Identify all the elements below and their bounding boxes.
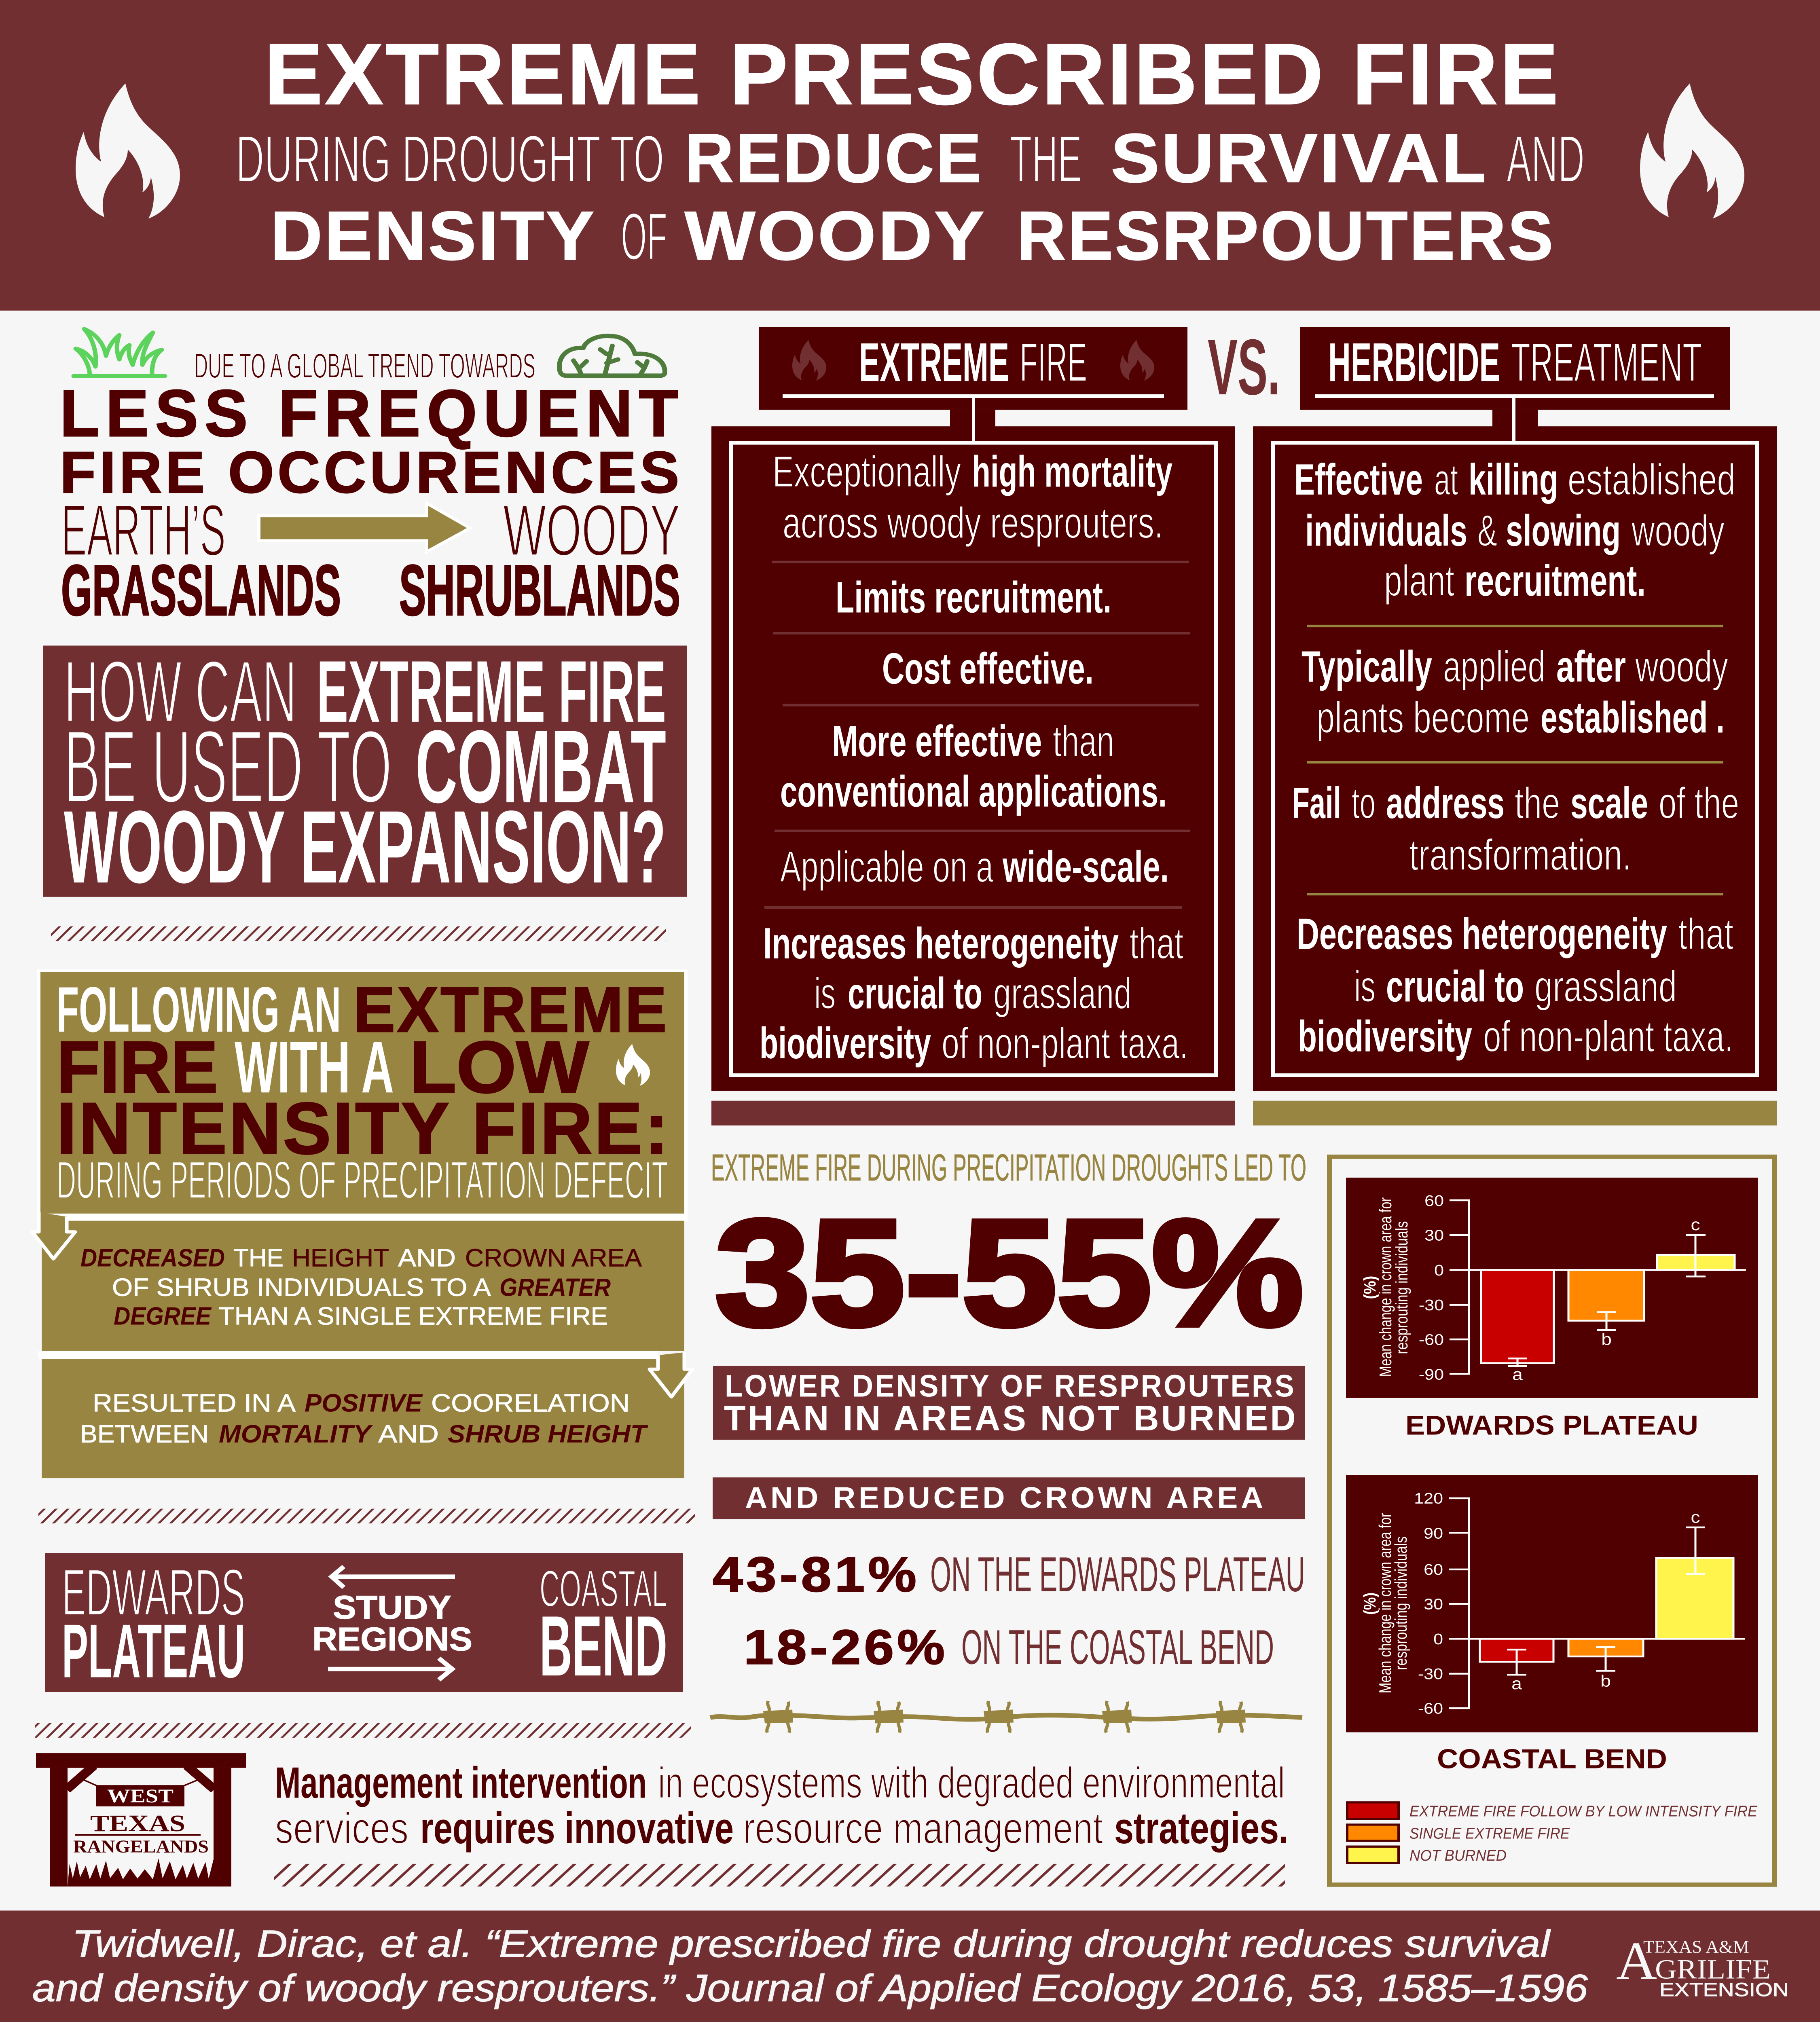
- heading: coastal bend: COASTAL BEND: [1437, 1744, 1667, 1774]
- header: extreme fire: FIRE: [1020, 332, 1087, 393]
- heading: following an extreme fire with a low intensity fire: [57, 973, 671, 1210]
- panel: resulted in: [38, 1351, 692, 1478]
- text: earth's grasslands: [61, 489, 341, 630]
- text: earth's grasslands: EARTH’S: [61, 489, 226, 571]
- legend: [1347, 1802, 1758, 1864]
- vs: VS.: [1208, 323, 1280, 411]
- panel: following an extreme fire: [37, 969, 688, 1221]
- panel: global trend: DUE TO A GLOBAL TREND TOWARDS: [194, 347, 535, 385]
- chart: edwards plateau: b: [1601, 1330, 1612, 1349]
- header: extreme fire: EXTREME: [859, 332, 1009, 393]
- panel: extreme fire list: grassland: [993, 969, 1132, 1018]
- panel: herbicide list: at: [1434, 455, 1458, 504]
- heading: following an extreme fire with a low intensity fire: EXTREME: [353, 973, 669, 1045]
- title: THE: [1010, 122, 1082, 196]
- panel: extreme fire list: wide-scale.: [1002, 843, 1169, 891]
- text: positive correlation: [80, 1389, 648, 1448]
- panel: question: EXTREME FIRE: [317, 643, 666, 740]
- panel: question: BE USED TO: [64, 709, 392, 824]
- panel: herbicide list: individuals: [1305, 507, 1467, 555]
- heading: less frequent fire occurences: [60, 376, 685, 505]
- panel: herbicide list: slowing: [1506, 507, 1621, 555]
- logo: agrilife extension: [1616, 1931, 1789, 2000]
- panel: herbicide list: grassland: [1534, 962, 1677, 1011]
- legend: EXTREME FIRE FOLLOW BY LOW INTENSITY FIRE: [1409, 1802, 1758, 1820]
- panel: extreme fire list: Exceptionally: [772, 448, 961, 496]
- citation: and density of woody resprouters.” Journal of Applied Ecology 2016, 53, 1585–1596: [32, 1967, 1588, 2009]
- panel: study regions: COASTAL: [540, 1560, 667, 1618]
- title: DENSITY: [271, 198, 596, 274]
- text: decreased: [80, 1244, 642, 1330]
- axis label: [1361, 1513, 1411, 1694]
- panel: herbicide list: after: [1556, 643, 1626, 691]
- text: management intervention: [275, 1759, 1289, 1853]
- logo: west texas rangelands: TEXAS: [90, 1810, 185, 1836]
- footer: [0, 1910, 1820, 2022]
- panel: extreme fire list: Applicable on a: [780, 843, 994, 891]
- heading: less frequent fire occurences: FIRE OCCURENCES: [60, 439, 683, 505]
- panel: herbicide list: killing: [1469, 455, 1558, 504]
- axis label: (%): [1361, 1593, 1380, 1615]
- callout: lower density: LOWER DENSITY OF RESPROUTERS: [725, 1368, 1296, 1403]
- chart: coastal bend: a: [1511, 1675, 1522, 1693]
- panel: herbicide list: Fail: [1292, 779, 1341, 828]
- panel: global trend: GRASSLANDS: [61, 550, 341, 630]
- chart: coastal bend: -30: [1418, 1665, 1443, 1682]
- chart: edwards plateau: c: [1691, 1216, 1700, 1234]
- text: decreased: DECREASED: [80, 1244, 225, 1272]
- text: management intervention: requires innovative: [420, 1804, 734, 1853]
- panel: extreme fire list: across woody resprouters.: [783, 499, 1163, 547]
- text: positive correlation: POSITIVE: [305, 1389, 423, 1417]
- panel: herbicide list: is: [1354, 962, 1376, 1011]
- panel: study regions: STUDY: [333, 1589, 451, 1626]
- title: WOODY: [685, 198, 986, 274]
- panel: study regions: PLATEAU: [62, 1608, 245, 1694]
- chart: coastal bend: 30: [1424, 1595, 1443, 1613]
- title: RESRPOUTERS: [1017, 198, 1555, 274]
- arrow: right: [328, 1658, 452, 1680]
- text: decreased: OF SHRUB INDIVIDUALS TO A: [112, 1273, 491, 1302]
- header: herbicide treatment: HERBICIDE: [1328, 332, 1500, 393]
- citation: Twidwell, Dirac, et al. “Extreme prescribed fire during drought reduces survival: [72, 1923, 1551, 1965]
- stat: edwards plateau: 43-81%: [713, 1547, 920, 1602]
- panel: global trend: [60, 329, 685, 630]
- panel: extreme fire list: crucial to: [848, 969, 982, 1018]
- text: positive correlation: SHRUB HEIGHT: [448, 1420, 648, 1448]
- title: DURING DROUGHT TO: [236, 122, 664, 196]
- arrow: left: [332, 1567, 455, 1587]
- title: [236, 26, 1585, 274]
- icon: bush: [559, 336, 665, 376]
- arrow: down right: [650, 1352, 692, 1397]
- panel: question: COMBAT: [415, 709, 666, 824]
- arrow: down left: [32, 1212, 75, 1259]
- chart: coastal bend: 90: [1424, 1525, 1443, 1542]
- panel: extreme fire list: high mortality: [972, 448, 1172, 496]
- panel: herbicide list: Effective: [1294, 455, 1423, 504]
- panel: decreased height: [32, 1212, 688, 1351]
- heading: following an extreme fire with a low intensity fire: INTENSITY FIRE:: [57, 1087, 671, 1169]
- text: woody shrublands: WOODY: [503, 489, 680, 571]
- chart: edwards plateau: 0: [1434, 1261, 1444, 1279]
- panel: herbicide list: of the: [1659, 779, 1739, 828]
- chart: edwards plateau: [1346, 1178, 1758, 1398]
- legend: SINGLE EXTREME FIRE: [1409, 1825, 1570, 1842]
- chart: coastal bend: 0: [1433, 1630, 1443, 1648]
- heading: following an extreme fire with a low intensity fire: WITH A: [235, 1026, 394, 1108]
- chart: coastal bend: c: [1691, 1508, 1700, 1527]
- panel: study regions: REGIONS: [312, 1621, 472, 1658]
- logo: agrilife extension: A: [1616, 1931, 1657, 1990]
- panel: extreme fire list: of non-plant taxa.: [942, 1019, 1188, 1068]
- panel: extreme fire list: More effective: [832, 717, 1042, 766]
- panel: question: WOODY EXPANSION?: [64, 789, 666, 905]
- icon: barbed wire: [710, 1701, 1302, 1732]
- header: herbicide treatment: [1300, 327, 1730, 410]
- panel: herbicide list: biodiversity: [1298, 1012, 1472, 1061]
- text: management intervention: in ecosystems with degraded environmental: [658, 1759, 1285, 1807]
- panel: herbicide list: plant: [1384, 556, 1454, 605]
- stat: coastal bend: 18-26%: [744, 1620, 948, 1675]
- header banner: AND: [1507, 122, 1585, 196]
- text: decreased: GREATER: [499, 1273, 611, 1302]
- text: decreased: CROWN AREA: [465, 1244, 642, 1272]
- icon: small flame: [616, 1044, 650, 1086]
- panel: extreme fire list: than: [1053, 717, 1114, 766]
- icon: flame right: [1120, 340, 1154, 381]
- panel: herbicide list: applied: [1443, 643, 1545, 691]
- arrow: grasslands to shrublands: [259, 503, 470, 552]
- panel: herbicide list: established: [1568, 455, 1735, 504]
- panel: key statistics: ON THE COASTAL BEND: [961, 1620, 1274, 1675]
- callout: reduced crown area: AND REDUCED CROWN AREA: [745, 1481, 1266, 1514]
- panel: study regions: [45, 1553, 683, 1694]
- panel: herbicide list: Typically: [1302, 643, 1432, 691]
- heading: following an extreme fire with a low intensity fire: FOLLOWING AN: [57, 973, 341, 1045]
- text: positive correlation: BETWEEN: [80, 1420, 209, 1448]
- panel: extreme fire list: Increases heterogeneity: [763, 919, 1119, 968]
- text: positive correlation: AND: [378, 1420, 439, 1448]
- panel: herbicide list: recruitment.: [1464, 556, 1646, 605]
- text: positive correlation: RESULTED IN A: [93, 1389, 296, 1417]
- chart: edwards plateau: -60: [1419, 1331, 1444, 1348]
- axis label: [1361, 1197, 1412, 1377]
- panel: study regions: EDWARDS: [62, 1555, 245, 1629]
- stat: edwards plateau: [713, 1547, 1305, 1602]
- chart: edwards plateau: 60: [1424, 1192, 1444, 1210]
- panel: herbicide list: transformation.: [1409, 831, 1632, 880]
- heading: following an extreme fire with a low intensity fire: FIRE: [57, 1026, 218, 1108]
- stat: 35-55%: 35-55%: [715, 1189, 1304, 1357]
- chart: coastal bend: 120: [1414, 1489, 1443, 1507]
- panel: extreme fire list: Limits recruitment.: [836, 573, 1111, 622]
- title: SURVIVAL: [1111, 120, 1488, 197]
- text: decreased: AND: [398, 1244, 456, 1272]
- callout: lower density: [713, 1366, 1305, 1440]
- text: woody shrublands: [399, 489, 680, 630]
- bar: olive accent: [1253, 1101, 1777, 1125]
- icon: grass: [74, 329, 165, 376]
- callout: lower density: THAN IN AREAS NOT BURNED: [724, 1398, 1298, 1438]
- title: REDUCE: [685, 120, 983, 197]
- axis label: Mean change in crown area for: [1376, 1513, 1395, 1694]
- panel: herbicide list: &: [1477, 507, 1497, 555]
- panel: herbicide list: to: [1352, 779, 1376, 828]
- legend: NOT BURNED: [1409, 1846, 1507, 1864]
- chart: edwards plateau: a: [1512, 1366, 1523, 1384]
- text: decreased: HEIGHT: [292, 1244, 389, 1272]
- text: management intervention: Management intervention: [275, 1759, 647, 1807]
- text: management intervention: services: [275, 1804, 408, 1853]
- panel: extreme fire list: conventional applications.: [780, 768, 1167, 816]
- panel: extreme fire list: Cost effective.: [882, 645, 1094, 693]
- panel: herbicide list: crucial to: [1386, 962, 1524, 1011]
- axis label: resprouting individuals: [1393, 1221, 1412, 1354]
- panel: study regions: BEND: [540, 1598, 667, 1694]
- logo: west texas rangelands: [36, 1753, 246, 1887]
- panel: charts frame: [1329, 1157, 1774, 1885]
- text: ON THE EDWARDS PLATEAU: [930, 1547, 1305, 1602]
- chart: coastal bend: 60: [1424, 1561, 1443, 1578]
- icon: right flame: [1640, 83, 1744, 218]
- panel: herbicide list: woody: [1635, 643, 1728, 691]
- text: positive correlation: COORELATION: [431, 1389, 630, 1417]
- axis label: resprouting individuals: [1392, 1536, 1411, 1670]
- title: OF: [621, 199, 667, 274]
- chart: coastal bend: [1346, 1475, 1758, 1732]
- panel: herbicide list: scale: [1570, 779, 1648, 828]
- chart: edwards plateau: -90: [1419, 1366, 1444, 1383]
- panel: herbicide list: the: [1515, 779, 1560, 828]
- panel: question: [43, 643, 687, 905]
- panel: herbicide list: woody: [1631, 507, 1725, 555]
- logo: agrilife extension: GRILIFE: [1655, 1953, 1771, 1984]
- panel: herbicide list: [1253, 398, 1777, 1091]
- axis label: (%): [1361, 1276, 1380, 1299]
- text: DURING PERIODS OF PRECIPITATION DEFECIT: [57, 1151, 668, 1210]
- panel: extreme fire list: that: [1130, 919, 1183, 968]
- panel: herbicide list: address: [1386, 779, 1505, 828]
- stat: coastal bend: [744, 1620, 1274, 1675]
- panel: extreme fire list: [711, 398, 1235, 1091]
- text: management intervention: resource management: [743, 1804, 1103, 1853]
- title: EXTREME PRESCRIBED FIRE: [265, 26, 1561, 123]
- heading: edwards plateau: EDWARDS PLATEAU: [1405, 1410, 1698, 1441]
- panel: key statistics: [711, 1146, 1306, 1675]
- logo: agrilife extension: EXTENSION: [1659, 1979, 1789, 2000]
- panel: question: HOW CAN: [64, 643, 297, 740]
- chart: edwards plateau: -30: [1419, 1296, 1444, 1313]
- chart: edwards plateau: 30: [1424, 1227, 1444, 1244]
- logo: agrilife extension: TEXAS A&M: [1643, 1937, 1749, 1957]
- panel: extreme fire list: is: [814, 969, 836, 1018]
- header banner: [0, 0, 1820, 311]
- text: decreased: DEGREE: [114, 1302, 212, 1330]
- icon: left flame: [76, 83, 180, 218]
- heading: less frequent fire occurences: LESS FREQUENT: [60, 376, 685, 450]
- axis label: Mean change in crown area for: [1376, 1197, 1395, 1377]
- logo: west texas rangelands: RANGELANDS: [73, 1837, 209, 1857]
- text: decreased: THAN A SINGLE EXTREME FIRE: [219, 1302, 608, 1330]
- icon: flame left: [792, 340, 826, 381]
- text: management intervention: strategies.: [1114, 1804, 1289, 1853]
- citation: [32, 1923, 1588, 2009]
- panel: extreme fire list: biodiversity: [760, 1019, 931, 1068]
- chart: coastal bend: -60: [1418, 1700, 1443, 1717]
- chart: coastal bend: b: [1600, 1672, 1611, 1690]
- panel: herbicide list: plants become: [1316, 694, 1530, 742]
- panel: global trend: SHRUBLANDS: [399, 550, 680, 630]
- text: positive correlation: MORTALITY: [219, 1420, 373, 1448]
- header: extreme fire: [759, 327, 1187, 410]
- heading: following an extreme fire with a low intensity fire: LOW: [409, 1026, 589, 1108]
- panel: herbicide list: that: [1678, 910, 1733, 958]
- text: decreased: THE: [233, 1244, 284, 1272]
- logo: west texas rangelands: WEST: [107, 1785, 174, 1807]
- bar: maroon accent: [711, 1101, 1235, 1125]
